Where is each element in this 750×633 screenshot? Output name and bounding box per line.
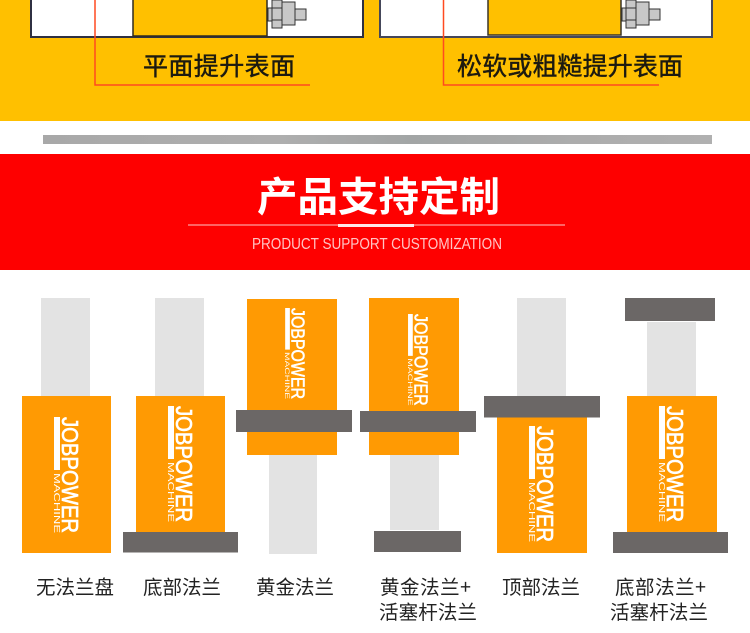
cylinder: bottom flange plus rod flange <box>613 298 728 553</box>
label: bottom flange: 底部法兰 <box>143 571 221 600</box>
cylinder: bottom flange <box>123 298 238 552</box>
label: bottom flange plus rod flange <box>610 571 708 625</box>
caption: flat surface: 平面提升表面 <box>143 47 295 83</box>
label: no flange: 无法兰盘 <box>36 571 114 600</box>
label: bottom flange plus rod flange: 活塞杆法兰 <box>610 596 708 625</box>
red leader line: soft surface <box>444 0 659 85</box>
panel: red customization banner <box>0 154 750 270</box>
heading underline <box>188 224 565 227</box>
cylinder: no flange <box>22 298 111 553</box>
label: top flange: 顶部法兰 <box>502 571 580 600</box>
banner subtitle: PRODUCT SUPPORT CUSTOMIZATION <box>252 236 502 253</box>
diagram: soft or rough surface lifting <box>380 0 712 37</box>
label: gold flange: 黄金法兰 <box>256 571 334 600</box>
label: gold flange plus rod flange <box>379 571 477 625</box>
label: gold flange plus rod flange: 活塞杆法兰 <box>379 596 477 625</box>
red leader line: flat surface <box>95 0 310 85</box>
label: bottom flange plus rod flange: 底部法兰+ <box>615 571 706 600</box>
banner heading: 产品支持定制 <box>257 164 500 223</box>
grey divider bar <box>43 135 712 144</box>
cylinder: gold flange plus rod flange <box>360 298 476 552</box>
label: gold flange plus rod flange: 黄金法兰+ <box>380 571 471 600</box>
diagram: flat surface lifting <box>31 0 363 37</box>
panel: yellow lifting surface section <box>0 0 750 121</box>
caption: soft surface: 松软或粗糙提升表面 <box>457 47 683 83</box>
cylinder: gold flange <box>236 299 352 554</box>
cylinder: top flange <box>484 298 600 553</box>
